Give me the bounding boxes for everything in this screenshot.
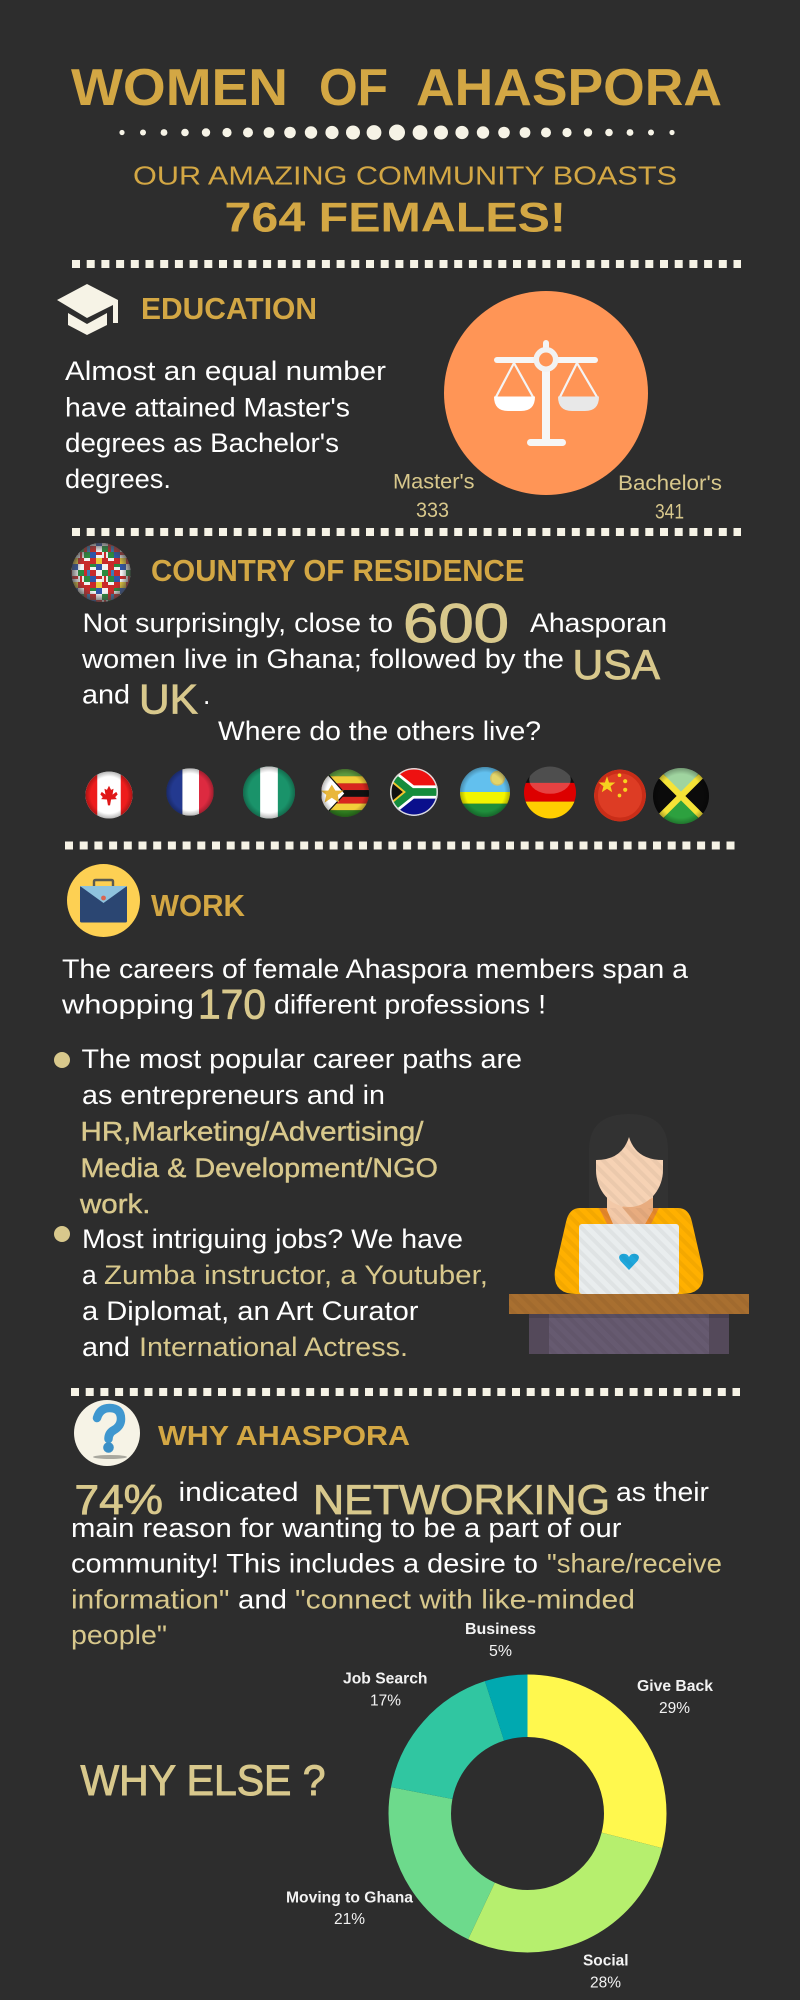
flag: Rwanda [460,767,510,818]
flag: Nigeria [243,766,295,818]
work intro text: The careers of female Ahaspora members span a [62,954,688,984]
bullet: popular careers: The most popular career paths are [82,1044,522,1074]
bullet: popular careers: work. [79,1189,150,1219]
label: job search [343,1670,428,1710]
panel: work [54,864,749,1362]
heading: why else: WHY ELSE ? [80,1757,326,1805]
work intro text [61,954,688,1028]
label: social: 28% [590,1974,621,1992]
work intro text: 170 [198,980,266,1028]
title: OF [319,59,388,117]
bullet: intriguing jobs: and [82,1332,130,1362]
education text: Almost an equal number [65,356,386,386]
bullet: intriguing jobs: Zumba instructor, a Youtuber, [104,1260,488,1290]
flag: France [166,768,214,816]
panel: why ahaspora [71,1400,722,1992]
label: give back [637,1678,713,1717]
flag: South Africa [388,768,438,816]
icon: flag globe [72,543,130,602]
flag: Jamaica [653,768,709,824]
networking text: "connect with like-minded [295,1584,635,1614]
label: give back: 29% [659,1700,690,1717]
residence text: Where do the others live? [218,716,541,746]
bullet: popular careers: HR,Marketing/Advertising/ [80,1116,424,1146]
bullet: intriguing jobs: a Diplomat, an Art Curator [82,1296,419,1326]
heading: education: EDUCATION [141,291,317,326]
title: WOMEN [71,59,288,117]
networking text: NETWORKING [313,1476,610,1523]
residence text: UK [139,676,198,722]
flag: China [594,770,646,822]
networking text: 74% [74,1476,163,1523]
icon: balance scale in orange circle [444,291,648,495]
flags row [86,765,709,824]
bullet: intriguing jobs: a [82,1260,97,1290]
residence text: 600 [403,592,509,654]
icon: graduation cap [57,284,118,335]
education text: degrees. [65,464,171,494]
residence text: Not surprisingly, close to [82,608,393,638]
bullet: popular careers [54,1044,522,1219]
label: business: 5% [489,1643,512,1660]
residence text: women live in Ghana; followed by the [81,644,564,674]
education text: have attained Master's [65,392,350,422]
label: moving to ghana: Moving to Ghana [286,1890,413,1906]
education text [65,356,386,494]
bullet: popular careers: Media & Development/NGO [80,1153,438,1183]
label: masters [393,470,474,522]
label: bachelors: 341 [655,500,684,524]
heading: country of residence: COUNTRY OF RESIDENCE [151,553,524,588]
flag: Germany [524,765,576,819]
label: masters: 333 [416,499,449,522]
panel: country of residence [72,543,709,824]
label: social: Social [583,1952,628,1970]
label: moving to ghana [286,1890,413,1928]
label: social [583,1952,628,1992]
label: job search: 17% [370,1692,401,1710]
networking text: people" [71,1620,167,1650]
label: bachelors [618,472,722,524]
residence text: . [203,680,210,710]
illustration: woman at desk with laptop [509,1114,749,1354]
flag: Canada [86,772,132,818]
bullet: intriguing jobs [54,1224,488,1362]
residence text [81,592,667,746]
icon: briefcase [67,864,140,937]
title: AHASPORA [416,59,722,117]
panel: education [57,284,722,524]
work intro text: different professions ! [274,990,546,1020]
networking text: indicated [178,1477,298,1507]
title [71,59,722,117]
label: business [465,1621,536,1660]
heading: work: WORK [151,888,246,923]
bullet: popular careers: as entrepreneurs and in [82,1080,385,1110]
label: business: Business [465,1621,536,1638]
networking text: information" [71,1584,230,1614]
work intro text: whopping [61,990,194,1020]
label: bachelors: Bachelor's [618,472,722,495]
bullet: intriguing jobs: Most intriguing jobs? We have [82,1224,463,1254]
networking text: and [238,1584,287,1614]
residence text: USA [572,641,660,688]
heading: why ahaspora: WHY AHASPORA [158,1420,410,1451]
residence text: Ahasporan [530,608,667,638]
residence text: and [82,680,130,710]
label: job search: Job Search [343,1670,428,1688]
networking text: "share/receive [547,1548,722,1578]
headline number: 764 FEMALES! [224,194,566,240]
bullet: intriguing jobs: International Actress. [139,1332,408,1362]
networking text: community! This includes a desire to [71,1548,538,1578]
flag: Zimbabwe [321,767,369,819]
networking text [71,1476,722,1650]
label: moving to ghana: 21% [334,1911,365,1928]
icon: question mark [74,1400,140,1466]
subtitle: OUR AMAZING COMMUNITY BOASTS [133,160,677,190]
label: give back: Give Back [637,1678,713,1695]
label: masters: Master's [393,470,474,494]
networking text: as their [616,1477,709,1507]
dotted ornament [119,124,675,140]
donut chart [286,1621,713,1992]
education text: degrees as Bachelor's [65,428,339,458]
networking text: main reason for wanting to be a part of our [71,1513,622,1543]
